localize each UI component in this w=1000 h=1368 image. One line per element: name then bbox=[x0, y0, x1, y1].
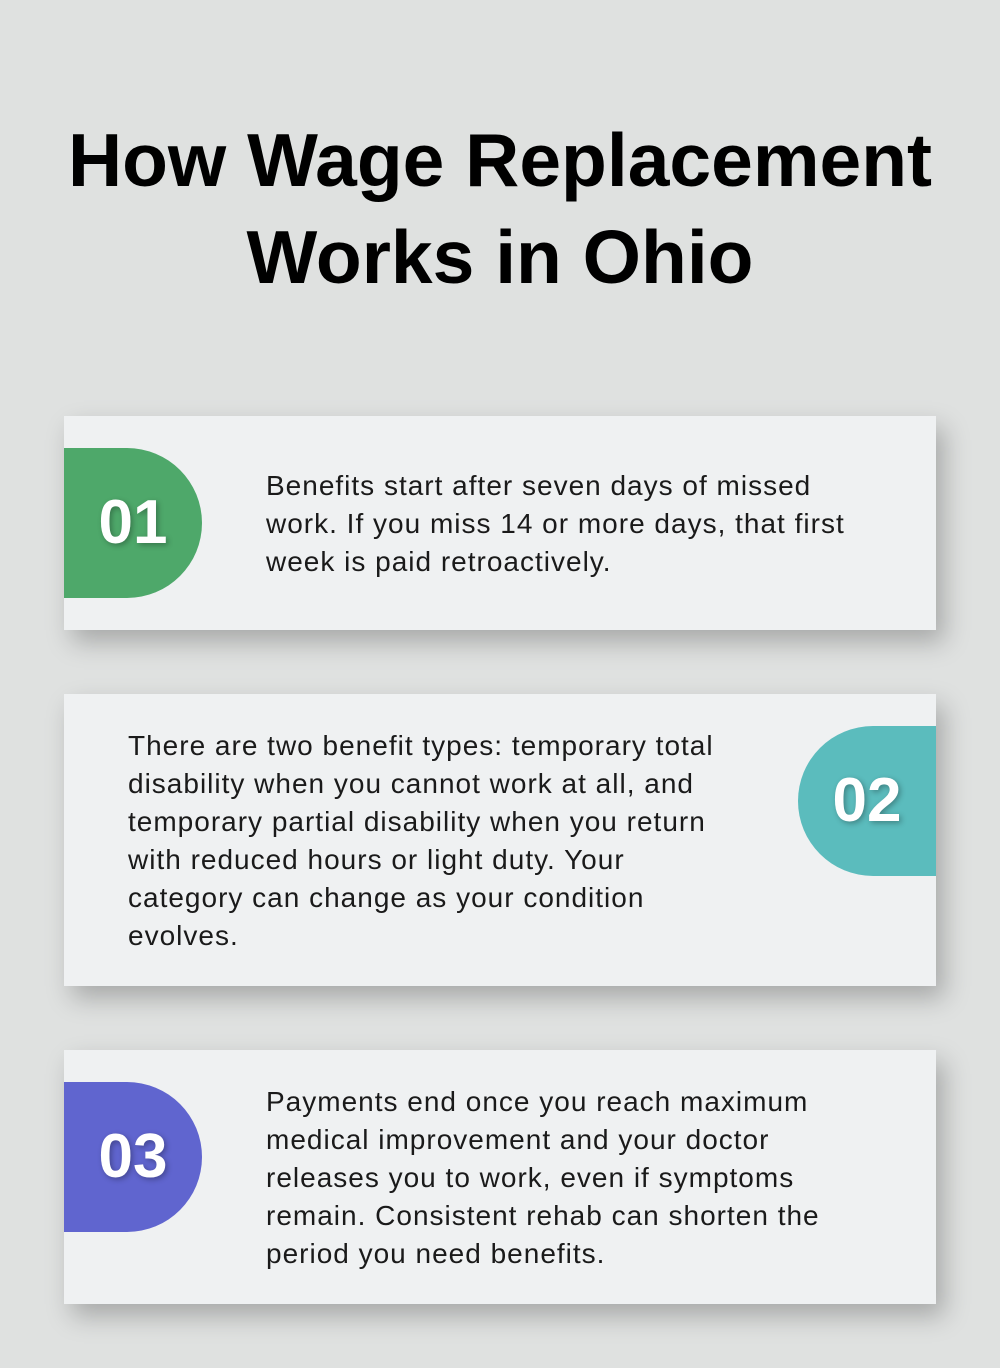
text 03: period you need benefits. bbox=[266, 1238, 605, 1269]
text 01 bbox=[266, 470, 845, 577]
badge 02 bbox=[798, 726, 936, 876]
title bbox=[68, 118, 932, 299]
text 01: work. If you miss 14 or more days, that first bbox=[266, 508, 845, 539]
text 03: Payments end once you reach maximum bbox=[266, 1086, 808, 1117]
text 03 bbox=[266, 1086, 820, 1269]
badge 03: 03 bbox=[99, 1122, 167, 1191]
panel: step 03 bbox=[64, 1050, 936, 1304]
text 02: There are two benefit types: temporary total bbox=[128, 730, 714, 761]
text 02: with reduced hours or light duty. Your bbox=[128, 844, 625, 875]
text 01: week is paid retroactively. bbox=[266, 546, 612, 577]
text 02 bbox=[128, 730, 714, 951]
text 02: evolves. bbox=[128, 920, 239, 951]
title: How Wage Replacement bbox=[68, 118, 932, 202]
text 02: category can change as your condition bbox=[128, 882, 644, 913]
panel: step 02 bbox=[64, 694, 936, 986]
text 03: releases you to work, even if symptoms bbox=[266, 1162, 794, 1193]
text 03: medical improvement and your doctor bbox=[266, 1124, 769, 1155]
badge 01 bbox=[64, 448, 202, 598]
text 01: Benefits start after seven days of missed bbox=[266, 470, 811, 501]
title: Works in Ohio bbox=[246, 215, 753, 299]
panel: step 01 bbox=[64, 416, 936, 630]
badge 01: 01 bbox=[99, 488, 167, 557]
badge 02: 02 bbox=[833, 766, 901, 835]
badge 03 bbox=[64, 1082, 202, 1232]
text 02: disability when you cannot work at all, and bbox=[128, 768, 694, 799]
text 03: remain. Consistent rehab can shorten the bbox=[266, 1200, 820, 1231]
text 02: temporary partial disability when you return bbox=[128, 806, 706, 837]
